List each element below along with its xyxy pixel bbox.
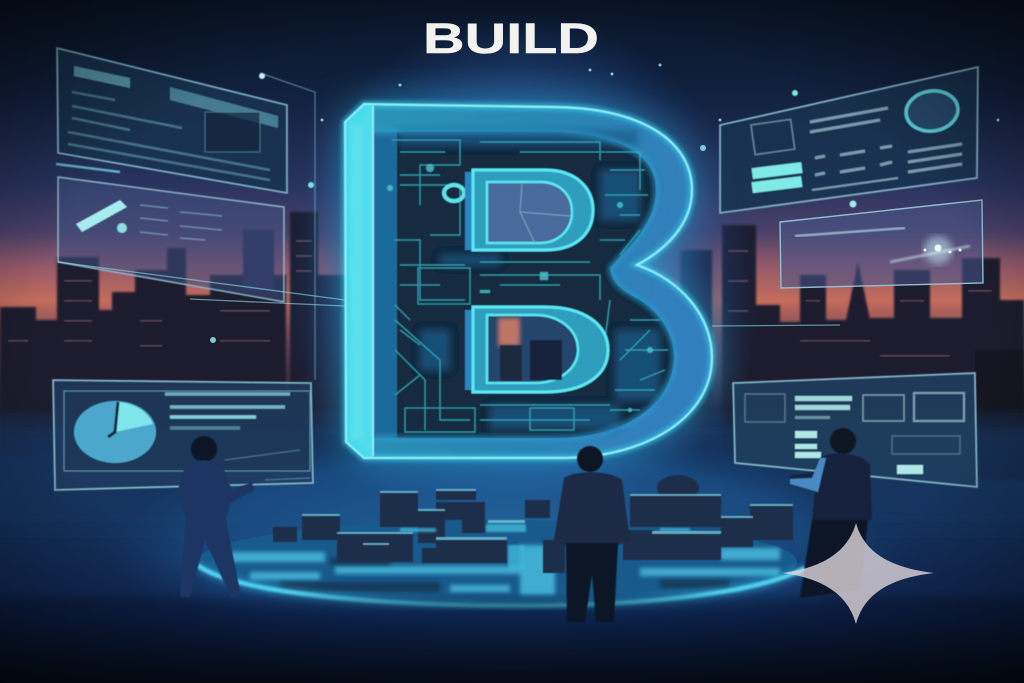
floor glow [70, 420, 930, 660]
B left stem face [345, 104, 373, 458]
B dark circuit interior [373, 132, 674, 438]
title: BUILD [423, 15, 599, 63]
platform disc [197, 520, 797, 604]
block lit top faces [302, 489, 793, 545]
glowing base ring [197, 565, 805, 606]
B inner left blue strip [373, 132, 397, 438]
person: right [790, 428, 872, 598]
holographic city platform [197, 475, 805, 606]
B lower counter [465, 307, 608, 392]
B upper counter [465, 170, 593, 250]
center glow [280, 10, 760, 570]
B inner chip node [444, 185, 479, 201]
panel: middle left screen [58, 177, 284, 302]
particle sparkles [210, 64, 1000, 343]
connector lines [58, 262, 840, 326]
city skyline left [0, 212, 348, 465]
letter B outer glow [345, 104, 712, 458]
panel: top right screen [720, 67, 978, 213]
B interior mottling [398, 130, 660, 429]
ring icon [903, 88, 961, 134]
city window lights [8, 240, 992, 357]
pie chart [74, 401, 156, 463]
lower blue haze [0, 420, 1024, 530]
B translucent tube [345, 104, 712, 458]
person: left [178, 436, 254, 598]
panel: bottom left screen with pie chart [53, 380, 313, 490]
platform glitter [215, 545, 780, 595]
panel: top left screen [56, 48, 315, 380]
cyan gaps [400, 524, 690, 569]
B neon outline [345, 104, 712, 458]
B inner bowl glow [373, 132, 674, 438]
B circuit traces [392, 140, 668, 432]
bottom fade [0, 592, 1024, 683]
blocks [273, 475, 793, 573]
watermark: four-point star [782, 523, 934, 624]
panel: bottom right screen [733, 373, 977, 487]
person: centre [554, 446, 630, 622]
city skyline right [680, 225, 1024, 480]
letter B [345, 104, 712, 458]
panel: middle right screen [780, 200, 983, 288]
